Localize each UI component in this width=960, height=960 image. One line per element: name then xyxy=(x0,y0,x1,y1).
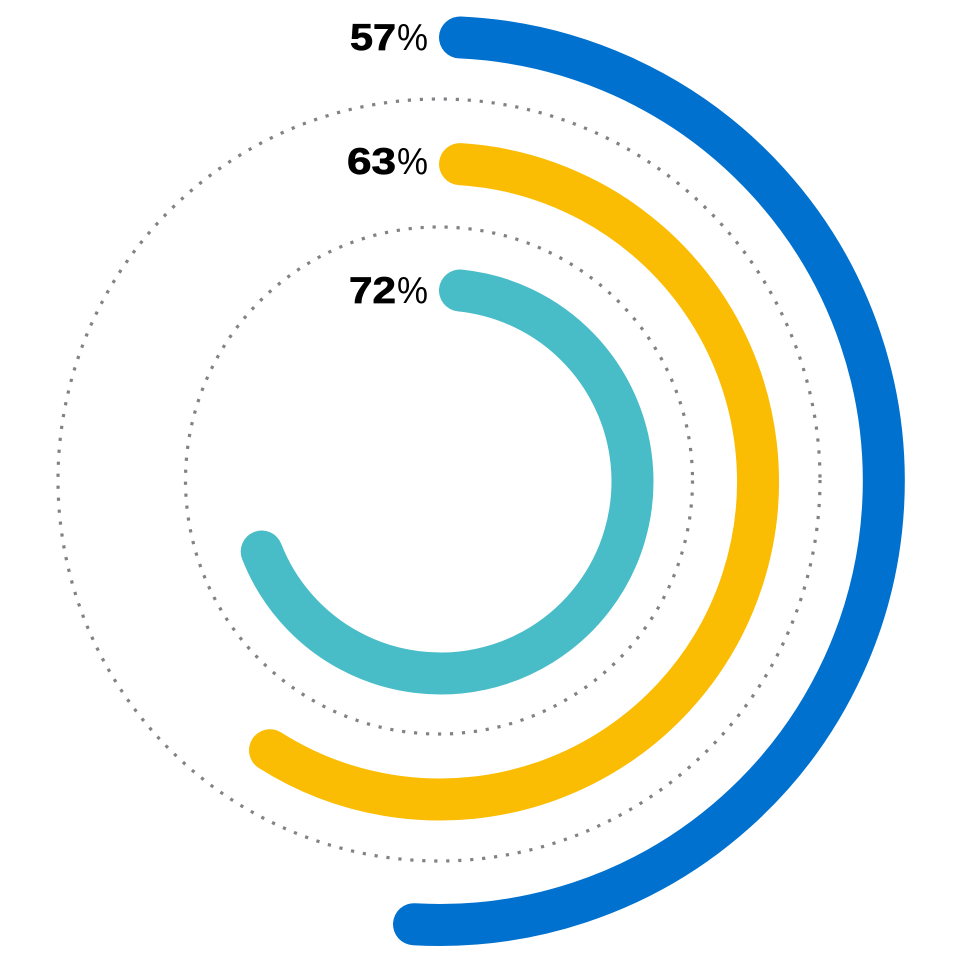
label: 72% xyxy=(349,270,428,312)
label: 57% xyxy=(350,17,428,59)
label: 63% xyxy=(347,141,428,183)
label: 63%: 63 xyxy=(347,141,396,182)
label: 63%: % xyxy=(397,141,428,183)
label: 72%: % xyxy=(397,270,428,312)
label: 57%: % xyxy=(397,17,428,59)
label: 57%: 57 xyxy=(350,17,396,58)
arc: 63% yellow xyxy=(270,164,758,800)
label: 72%: 72 xyxy=(349,270,396,311)
arc: 57% blue xyxy=(414,37,884,925)
arc: 72% teal xyxy=(262,290,632,674)
